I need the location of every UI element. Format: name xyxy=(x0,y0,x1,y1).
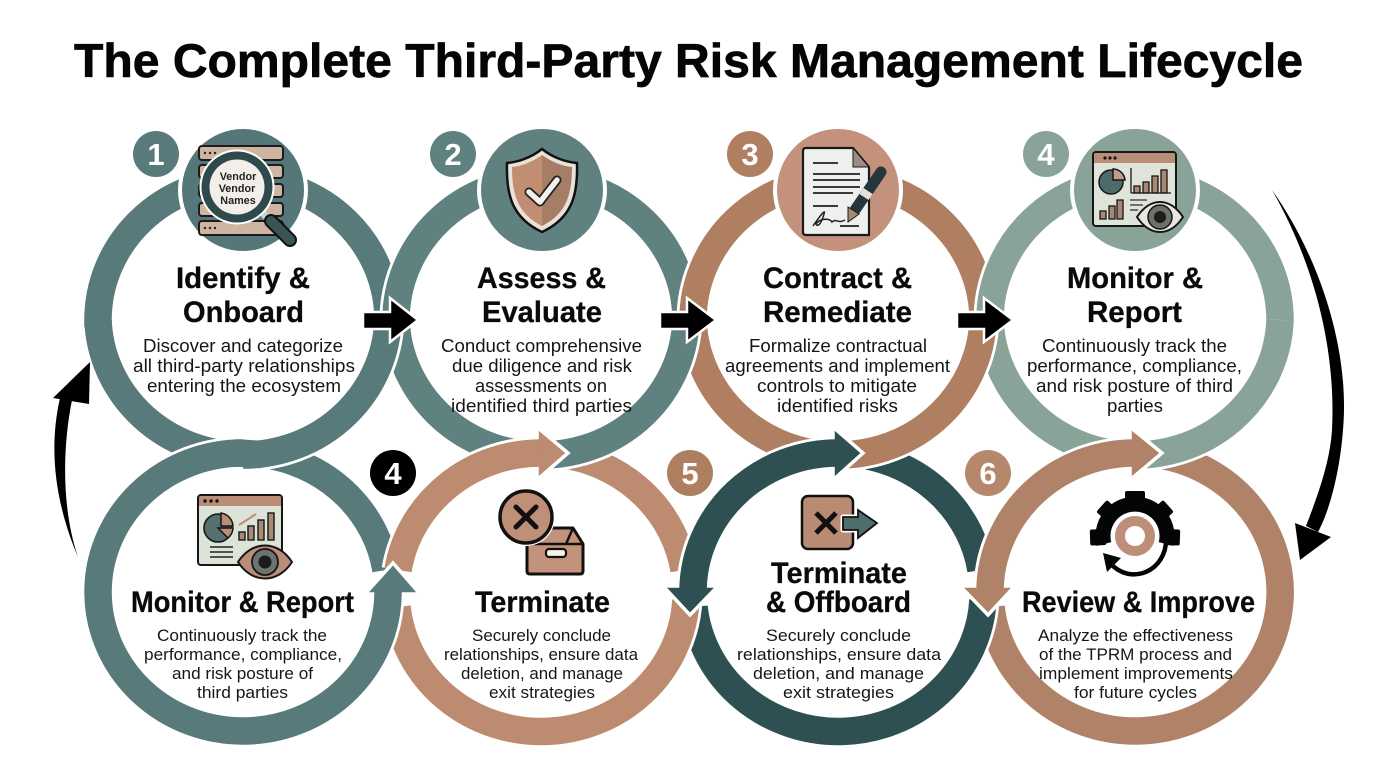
icon: shield check xyxy=(477,125,607,255)
description: Monitor & Report (bottom): third parties xyxy=(197,683,288,702)
description: Contract & Remediate xyxy=(725,336,950,416)
heading: Terminate & Offboard xyxy=(766,557,911,619)
description: Terminate & Offboard xyxy=(737,626,942,702)
ring 8 arrow band xyxy=(960,427,1162,615)
description: Monitor & Report (top): and risk posture of third xyxy=(1036,376,1233,396)
heading: Contract & Remediate xyxy=(763,262,912,329)
heading: Identify & Onboard: Identify & xyxy=(176,262,310,295)
ring 1 upper arcs xyxy=(98,180,388,327)
description: Terminate: relationships, ensure data xyxy=(444,645,639,664)
badge 4 top: 4 xyxy=(1037,137,1055,172)
icon: vendor list magnifier: Vendor xyxy=(219,183,256,195)
heading: Terminate & Offboard: & Offboard xyxy=(766,586,911,619)
description: Monitor & Report (bottom): Continuously track the xyxy=(157,626,327,645)
description: Identify & Onboard: all third-party relationships xyxy=(133,356,355,376)
heading: Contract & Remediate: Remediate xyxy=(763,296,912,329)
description: Terminate & Offboard: deletion, and manage xyxy=(753,664,924,683)
ring 4 lower left arc xyxy=(990,320,1125,455)
badge 2: 2 xyxy=(444,137,462,172)
description: Review & Improve: Analyze the effectiveness xyxy=(1038,626,1233,645)
description: Assess & Evaluate xyxy=(441,336,642,416)
heading: Terminate & Offboard: Terminate xyxy=(771,557,907,590)
heading: Identify & Onboard: Onboard xyxy=(183,296,304,329)
description: Identify & Onboard: Discover and categorize xyxy=(143,336,343,356)
ring 2 lower left arc xyxy=(396,320,531,455)
ring 7 upper right arc xyxy=(868,456,981,570)
icon: vendor list magnifier: Names xyxy=(220,195,256,207)
arrow: curved down from top row to bottom row xyxy=(1272,190,1344,560)
ring 3 upper arcs xyxy=(693,180,983,327)
icon: monitoring dashboard bottom xyxy=(198,495,292,578)
band join between ring 5 and ring 1 xyxy=(236,453,262,454)
heading: Identify & Onboard xyxy=(176,262,310,329)
heading: Assess & Evaluate xyxy=(477,262,606,329)
heading: Review & Improve: Review & Improve xyxy=(1022,586,1255,619)
description: Identify & Onboard xyxy=(133,336,355,396)
heading: Assess & Evaluate: Assess & xyxy=(477,262,606,295)
description: Contract & Remediate: agreements and implement xyxy=(725,356,950,376)
description: Terminate & Offboard: relationships, ensure data xyxy=(737,645,942,664)
description: Monitor & Report (top) xyxy=(1027,336,1242,416)
ring 2 upper arcs xyxy=(396,180,686,327)
arrow: step 3 to 4 xyxy=(957,298,1013,342)
badge 6: 6 xyxy=(979,456,997,491)
description: Review & Improve: implement improvements xyxy=(1039,664,1233,683)
heading: Assess & Evaluate: Evaluate xyxy=(482,296,602,329)
description: Contract & Remediate: identified risks xyxy=(777,396,898,416)
description: Review & Improve: of the TPRM process and xyxy=(1039,645,1232,664)
description: Assess & Evaluate: due diligence and risk xyxy=(452,356,633,376)
description: Terminate: deletion, and manage xyxy=(461,664,623,683)
badge 5: 5 xyxy=(681,456,699,491)
badge 1 xyxy=(133,131,179,177)
description: Terminate: Securely conclude xyxy=(472,626,611,645)
description: Terminate: exit strategies xyxy=(489,683,595,702)
ring 4 lower right arc xyxy=(1125,320,1280,455)
description: Monitor & Report (bottom) xyxy=(144,626,342,702)
description: Contract & Remediate: controls to mitigate xyxy=(757,376,917,396)
heading: Contract & Remediate: Contract & xyxy=(763,262,912,295)
ring 7 lower arc xyxy=(694,600,983,732)
ring 4 upper arcs xyxy=(990,180,1280,327)
badge 2 xyxy=(430,131,476,177)
ring 6 lower arc xyxy=(397,600,686,732)
ring 1 lower left arc xyxy=(98,320,233,455)
arrow: step 2 to 3 xyxy=(660,298,716,342)
ring 8 right and lower arc xyxy=(991,456,1280,731)
ring 2 lower right arc xyxy=(531,320,686,455)
icon: signed contract xyxy=(773,125,903,255)
ring 3 lower right arc xyxy=(828,320,983,455)
description: Review & Improve xyxy=(1038,626,1233,702)
icon: vendor list magnifier xyxy=(178,125,308,255)
heading: Monitor & Report (top): Report xyxy=(1087,296,1182,329)
description: Monitor & Report (top): performance, compliance, xyxy=(1027,356,1242,376)
badge 4 top xyxy=(1023,131,1069,177)
badge 1: 1 xyxy=(147,137,165,172)
badge 4 bottom: 4 xyxy=(384,456,402,491)
ring 6 upper right arc xyxy=(571,456,684,570)
icon: terminate box xyxy=(497,488,583,574)
heading: Monitor & Report (top) xyxy=(1067,262,1203,329)
badge 6 xyxy=(965,450,1011,496)
icon: offboard exit xyxy=(802,496,877,549)
ring 5 arrow band xyxy=(98,453,420,731)
description: Monitor & Report (top): parties xyxy=(1107,396,1163,416)
description: Assess & Evaluate: Conduct comprehensive xyxy=(441,336,642,356)
ring 5 upper right arc xyxy=(273,456,386,570)
ring 3 lower left arc xyxy=(693,320,828,455)
arrow: return from bottom row up to step 1 xyxy=(53,362,90,557)
description: Monitor & Report (top): Continuously track the xyxy=(1042,336,1227,356)
badge 3 xyxy=(727,131,773,177)
description: Identify & Onboard: entering the ecosystem xyxy=(147,376,341,396)
description: Assess & Evaluate: assessments on xyxy=(475,376,607,396)
icon: monitoring dashboard top xyxy=(1070,125,1200,255)
icon: gear improvement cycle xyxy=(1090,491,1180,574)
description: Monitor & Report (bottom): performance, compliance, xyxy=(144,645,342,664)
arrow: step 1 to 2 xyxy=(363,298,418,342)
badge 3: 3 xyxy=(741,137,759,172)
description: Terminate xyxy=(444,626,639,702)
heading: Terminate: Terminate xyxy=(475,586,610,619)
title: The Complete Third-Party Risk Management Lifecycle xyxy=(74,34,1303,87)
ring 1 lower right arc xyxy=(233,320,388,455)
description: Monitor & Report (bottom): and risk posture of xyxy=(172,664,313,683)
heading: Monitor & Report (bottom): Monitor & Report xyxy=(131,586,354,619)
description: Terminate & Offboard: Securely conclude xyxy=(766,626,911,645)
description: Assess & Evaluate: identified third parties xyxy=(451,396,632,416)
description: Review & Improve: for future cycles xyxy=(1074,683,1197,702)
ring 7 arrow band xyxy=(663,427,863,615)
ring 6 arrow band xyxy=(398,427,568,570)
badge 4 bottom xyxy=(370,450,416,496)
heading: Monitor & Report (top): Monitor & xyxy=(1067,262,1203,295)
description: Terminate & Offboard: exit strategies xyxy=(783,683,894,702)
badge 5 xyxy=(667,450,713,496)
icon: vendor list magnifier: Vendor xyxy=(220,171,257,183)
description: Contract & Remediate: Formalize contractual xyxy=(749,336,927,356)
